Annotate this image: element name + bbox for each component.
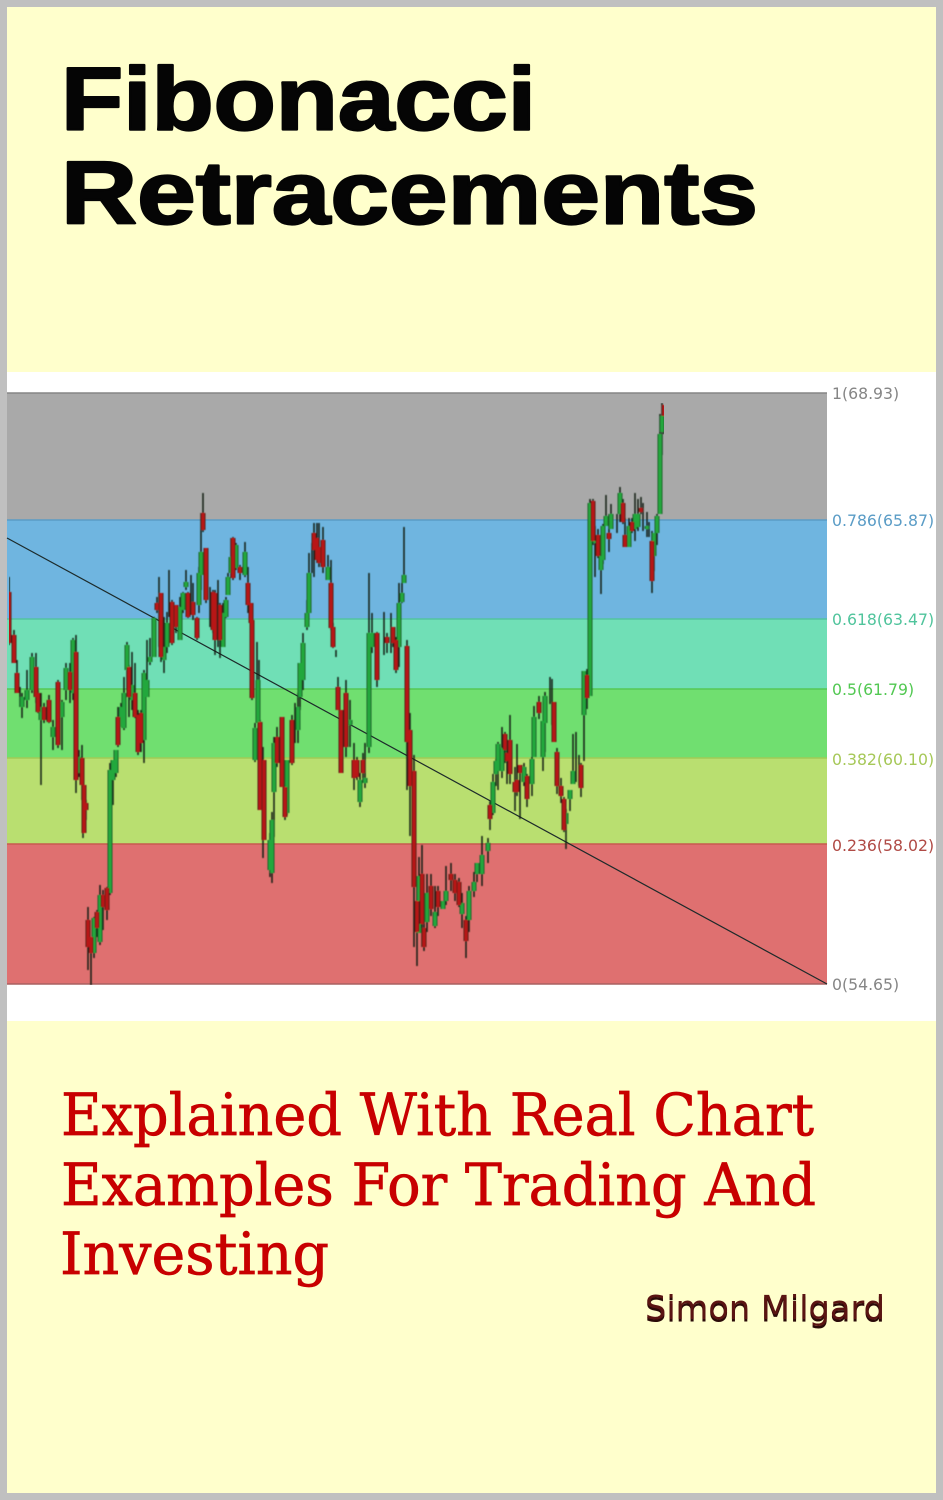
title: Retracements [61,142,758,242]
subtitle: Explained With Real Chart [61,1081,814,1149]
candlestick wicks [9,403,664,985]
green candle bodies [22,416,662,953]
subtitle [60,1081,816,1288]
retracement bands [7,393,827,984]
subtitle: Investing [60,1220,329,1288]
label: level 1: 1(68.93) [832,384,899,403]
label: level 0.5: 0.5(61.79) [832,680,914,699]
label: level 0.786: 0.786(65.87) [832,511,934,530]
label: level 0.618: 0.618(63.47) [832,610,934,629]
title [61,48,758,242]
author name: Simon Milgard [645,1288,885,1327]
label: level 0: 0(54.65) [832,975,899,994]
panel: fibonacci chart [7,372,936,1021]
subtitle: Examples For Trading And [61,1151,816,1219]
label: level 0.236: 0.236(58.02) [832,836,934,855]
chart white background [7,372,936,1021]
level labels [832,384,934,994]
candlesticks [9,403,664,985]
label: level 0.382: 0.382(60.10) [832,750,934,769]
title: Fibonacci [61,48,536,148]
red candle bodies [9,405,664,953]
diagonal trend line [7,538,827,984]
author name: Simon Milgard [645,1290,885,1330]
